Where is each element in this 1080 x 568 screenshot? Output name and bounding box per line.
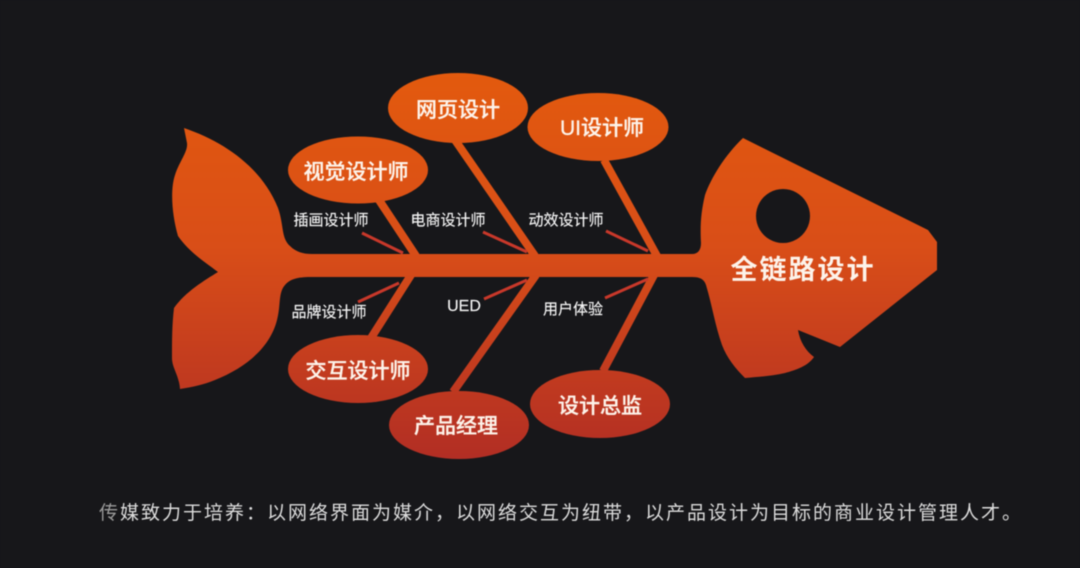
ellipse: 产品经理 [389, 391, 529, 459]
bone: 网页设计 [455, 140, 535, 256]
label: 品牌设计师: 品牌设计师 [291, 304, 367, 321]
ellipse: 视觉设计师: 视觉设计师 [304, 161, 408, 184]
branch: UED [484, 280, 527, 299]
bone: 交互设计师 [371, 275, 411, 338]
caption: 传媒致力于培养：以网络界面为媒介，以网络交互为纽带，以产品设计为目标的商业设计管理人才。 [99, 502, 1023, 524]
ellipse: UI设计师: UI设计师 [560, 117, 644, 140]
bones [371, 140, 657, 392]
fish tail [172, 128, 312, 389]
ellipse: UI设计师 [528, 93, 668, 161]
bone: UI设计师 [604, 160, 657, 256]
branch: 品牌设计师 [358, 283, 399, 302]
ellipse: 设计总监: 设计总监 [558, 395, 642, 418]
ellipse: 网页设计: 网页设计 [416, 99, 500, 122]
bone: 视觉设计师 [379, 200, 416, 256]
label: 插画设计师: 插画设计师 [293, 212, 369, 229]
branch: 电商设计师 [483, 232, 527, 252]
fish head [692, 138, 937, 378]
ellipse: 产品经理: 产品经理 [414, 415, 498, 438]
ellipse: 视觉设计师 [288, 136, 428, 204]
label: 电商设计师: 电商设计师 [410, 212, 486, 229]
ellipse: 交互设计师: 交互设计师 [306, 360, 410, 383]
bone: 设计总监 [603, 275, 654, 371]
ellipse: 交互设计师 [288, 335, 428, 403]
branch: 动效设计师 [606, 231, 648, 251]
label: 动效设计师: 动效设计师 [528, 212, 604, 229]
ellipse: 设计总监 [530, 370, 670, 438]
label: 用户体验: 用户体验 [543, 301, 603, 318]
fish spine [300, 254, 715, 277]
branch: 用户体验 [605, 279, 648, 298]
bone: 产品经理 [453, 275, 536, 392]
small branches [358, 231, 648, 302]
ellipse: 网页设计 [388, 73, 528, 143]
fish body [172, 128, 937, 389]
branch: 插画设计师 [362, 233, 403, 253]
label: UED: UED [447, 298, 481, 315]
label: 全链路设计: 全链路设计 [730, 255, 876, 285]
